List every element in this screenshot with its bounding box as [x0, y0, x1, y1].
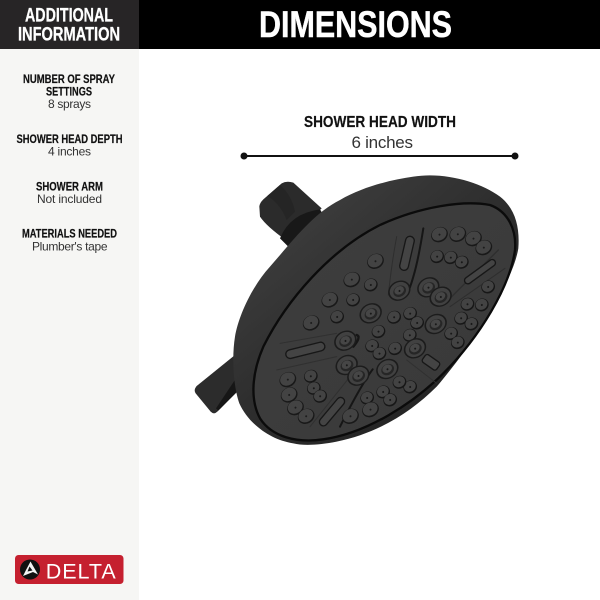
long spray slots [285, 235, 497, 428]
width dimension label [304, 114, 456, 152]
nozzles: right [442, 278, 497, 352]
nozzles: top right [428, 224, 495, 271]
nozzles: bottom left [277, 367, 329, 427]
title banner: dimensions: DIMENSIONS [259, 3, 452, 45]
width dimension label: 6 inches [352, 133, 413, 152]
spec: number of spray settings: SETTINGS [46, 87, 92, 99]
title banner: dimensions [139, 0, 600, 49]
logo: Delta [15, 555, 124, 584]
spec: materials needed: Plumber's tape [32, 240, 108, 254]
logo: Delta: DELTA [46, 559, 116, 583]
sidebar heading [0, 0, 139, 49]
spec: number of spray settings [23, 74, 115, 111]
sidebar heading: INFORMATION [18, 24, 120, 46]
spec: shower head depth: 4 inches [48, 145, 91, 159]
shower head illustration [195, 175, 519, 445]
arrow: width dimension line [240, 152, 518, 160]
spec: shower head depth: SHOWER HEAD DEPTH [16, 134, 122, 146]
width dimension label: SHOWER HEAD WIDTH [304, 114, 456, 131]
panel: additional information sidebar [0, 0, 139, 600]
spec: number of spray settings: NUMBER OF SPRAY [23, 74, 115, 86]
spec: materials needed [22, 229, 117, 254]
nozzles: bottom middle [339, 373, 419, 427]
sidebar heading: ADDITIONAL [25, 4, 113, 26]
spec: materials needed: MATERIALS NEEDED [22, 229, 117, 241]
spec: shower arm [36, 182, 103, 206]
spec: shower arm: Not included [37, 192, 102, 206]
lever handle [195, 355, 238, 413]
spec: shower head depth [16, 134, 122, 159]
head body [233, 175, 519, 445]
nozzles: center cluster [363, 305, 426, 363]
shower arm connector [259, 182, 323, 248]
spoke ridges [277, 228, 505, 427]
nozzles: upper left [300, 251, 387, 334]
spray face [253, 203, 515, 440]
nozzles: ringed inner circle [330, 273, 456, 390]
spec: number of spray settings: 8 sprays [48, 97, 91, 111]
spec: shower arm: SHOWER ARM [36, 182, 103, 194]
